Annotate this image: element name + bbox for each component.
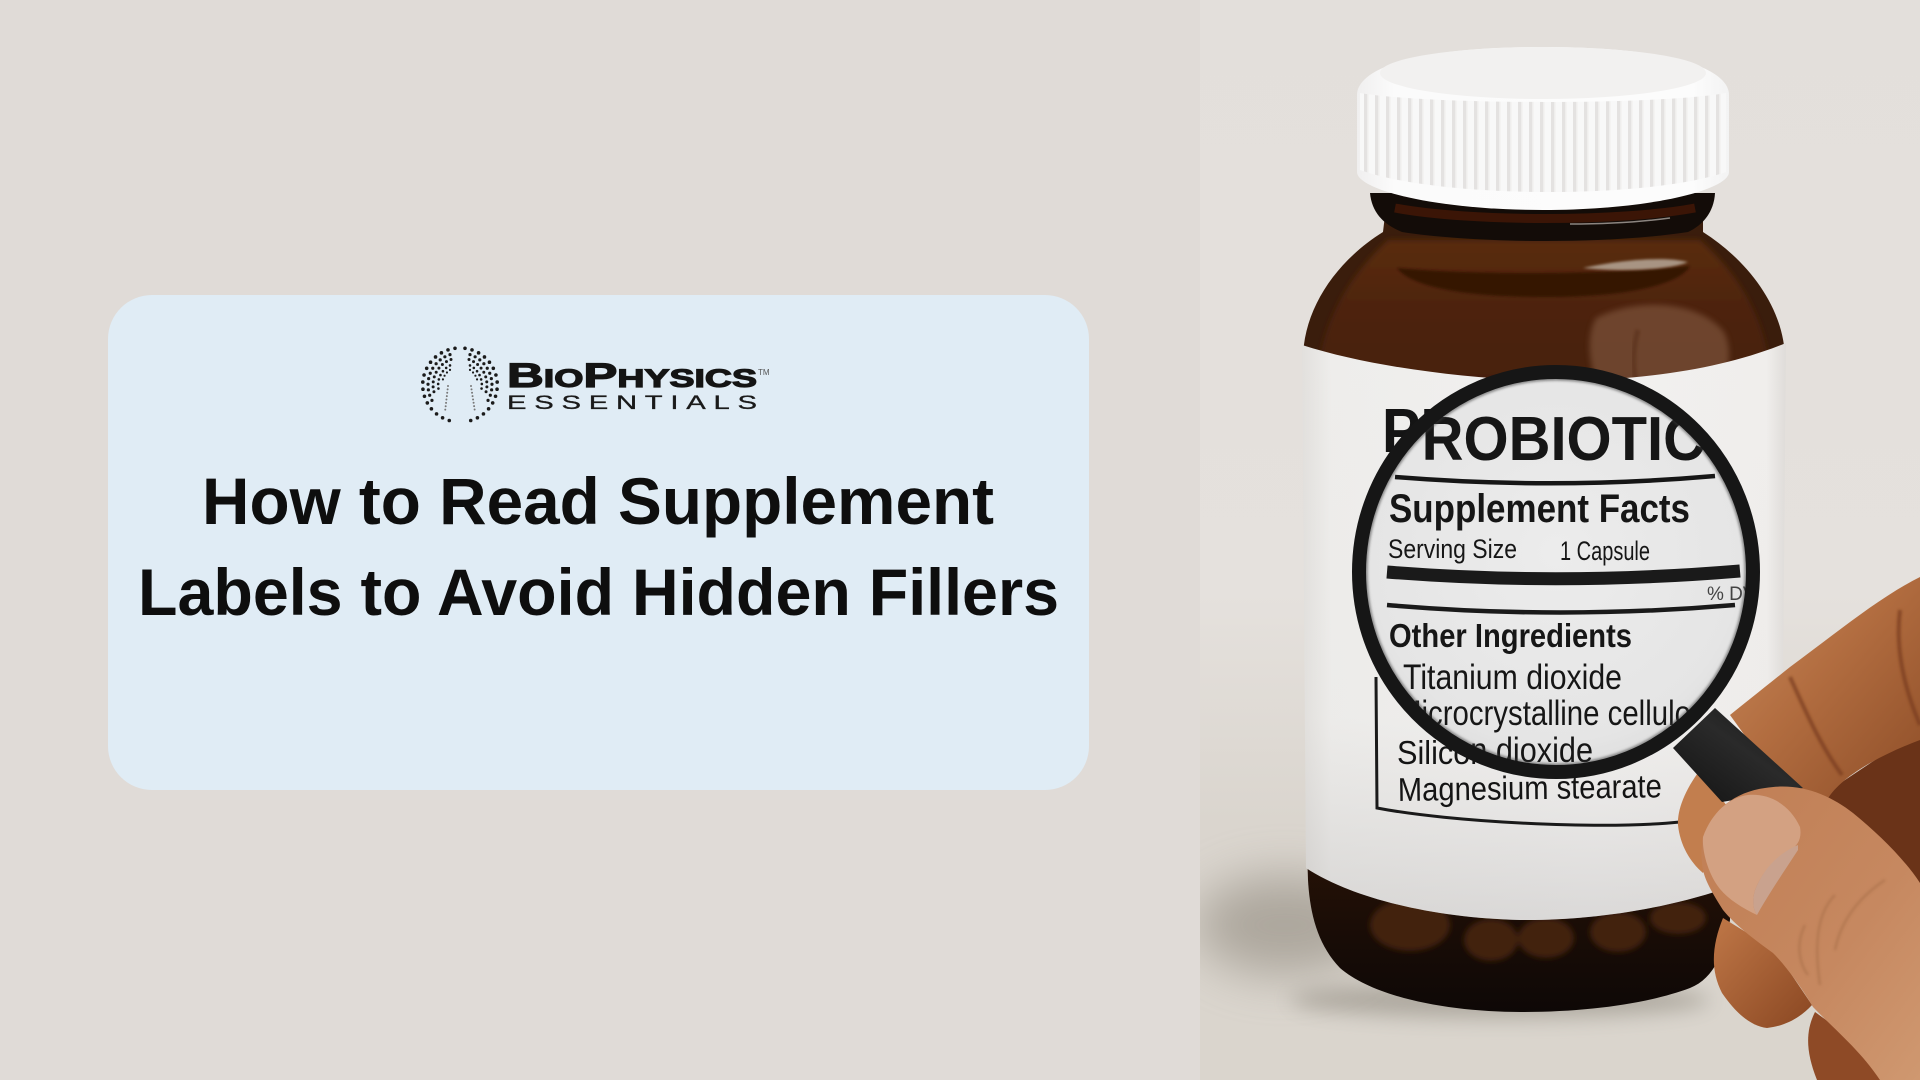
cap ridges xyxy=(1360,93,1726,192)
panel: title card xyxy=(108,295,1089,790)
glass shoulder edge xyxy=(1303,215,1785,410)
logo mark: dotted body circle xyxy=(423,348,497,422)
microcrystalline cellulose: Microcrystalline cellulose xyxy=(1397,694,1722,733)
bottle shadow on table xyxy=(1195,875,1710,1018)
thumb xyxy=(1702,787,1920,1080)
card background xyxy=(108,295,1089,790)
finger behind handle xyxy=(1678,770,1730,873)
supplement facts heading: Supplement Facts xyxy=(1389,487,1690,531)
thin rule xyxy=(1387,605,1735,612)
hand xyxy=(1673,577,1920,1080)
index finger xyxy=(1730,577,1920,800)
lens xyxy=(1362,375,1750,769)
title xyxy=(138,464,1059,629)
silicon dioxide magnified: Silicon dioxide xyxy=(1397,731,1593,770)
serving size: Serving Size xyxy=(1388,534,1517,564)
ingredient box frame xyxy=(1376,677,1680,825)
cap top recess xyxy=(1380,47,1706,99)
bottom finger xyxy=(1808,1012,1882,1080)
ingredient partly hidden by lens: Silicon dioxide xyxy=(1397,734,1593,771)
title line 2: Labels to Avoid Hidden Fillers xyxy=(138,555,1059,629)
magnified brand: PROBIOTIC xyxy=(1383,405,1705,474)
knuckle wrinkles xyxy=(1799,880,1885,985)
dark reflection band xyxy=(1397,266,1690,297)
glass base xyxy=(1307,850,1730,1012)
shadow gap between fingers xyxy=(1815,730,1920,895)
titanium dioxide: Titanium dioxide xyxy=(1403,658,1622,697)
capsule count: 1 Capsule xyxy=(1560,536,1650,566)
rule under brand xyxy=(1395,476,1715,483)
title line 1: How to Read Supplement xyxy=(202,464,994,538)
thumbnail xyxy=(1703,795,1801,915)
glass shoulder amber xyxy=(1316,240,1772,400)
trademark: TM xyxy=(758,368,770,377)
logo wordmark: B IO P HYSICS xyxy=(507,357,757,395)
other ingredients heading: Other Ingredients xyxy=(1389,617,1632,654)
thick rule xyxy=(1387,571,1740,579)
logo: BioPhysics Essentials xyxy=(423,348,770,422)
daily value header: % DV xyxy=(1707,584,1756,605)
nail moon xyxy=(1753,845,1798,915)
magnified label text xyxy=(1383,405,1756,770)
bottle xyxy=(1302,47,1786,1012)
lens ring xyxy=(1359,372,1753,772)
magnifying glass xyxy=(1359,372,1756,772)
bottle neck rings xyxy=(1370,193,1715,241)
lower finger xyxy=(1714,918,1812,1028)
finger creases xyxy=(1790,610,1920,775)
capsules in base xyxy=(1370,899,1706,961)
ingredient below lens: Magnesium stearate xyxy=(1398,767,1662,808)
brand letters outside lens: PR xyxy=(1382,397,1462,466)
logo subline: ESSENTIALS xyxy=(507,393,757,414)
cap body xyxy=(1357,47,1729,210)
magnifier handle xyxy=(1673,708,1803,802)
label xyxy=(1302,343,1786,920)
left background xyxy=(0,0,1200,1080)
photo background xyxy=(1200,0,1920,1080)
bottle cap xyxy=(1357,47,1729,210)
glass highlights xyxy=(1583,259,1729,395)
photo: supplement bottle under magnifier xyxy=(1195,0,1920,1080)
